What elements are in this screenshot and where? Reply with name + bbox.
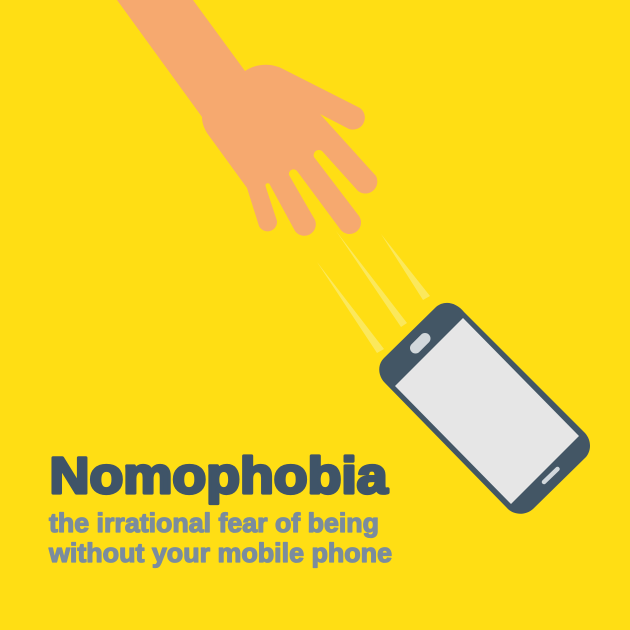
- subtitle: the irrational fear of being: [49, 508, 379, 538]
- phone body: [379, 303, 590, 514]
- subtitle: without your mobile phone: [48, 538, 392, 568]
- subtitle: [48, 508, 392, 568]
- phone screen: [395, 318, 579, 504]
- motion streaks: [317, 231, 430, 353]
- phone home button: [544, 469, 558, 482]
- icon: falling phone: [379, 303, 590, 514]
- icon: reaching hand: [117, 0, 377, 236]
- phone speaker: [416, 338, 425, 348]
- title: Nomophobia: [50, 447, 388, 504]
